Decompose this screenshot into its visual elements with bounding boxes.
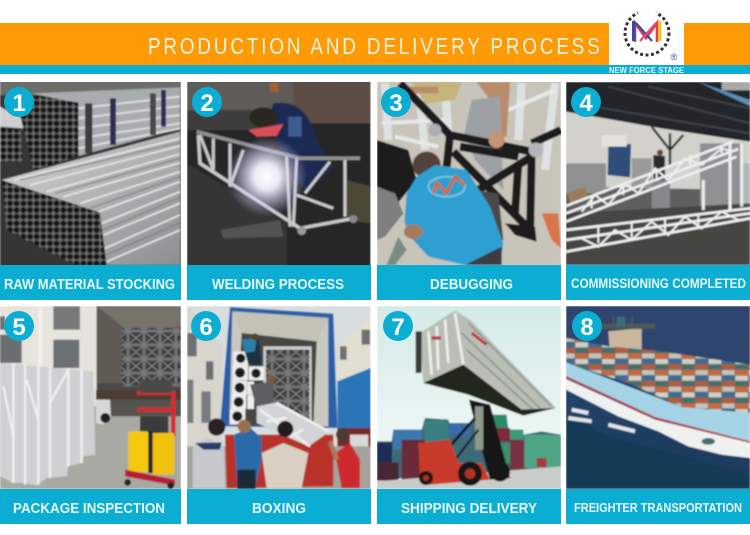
step number 5: 5	[12, 314, 26, 341]
step number 6	[191, 311, 221, 341]
panel 2: welding process	[187, 80, 371, 300]
step number 7: 7	[391, 314, 405, 341]
photo: container ship at sea	[566, 306, 750, 489]
panel 1: raw material stocking	[0, 80, 181, 300]
step number 4	[571, 87, 601, 117]
caption bar	[0, 265, 181, 300]
registered mark: ®	[671, 52, 678, 62]
caption bar	[187, 489, 371, 524]
panel 3: debugging	[377, 80, 561, 300]
photo: workers loading truss into container	[187, 306, 371, 489]
caption: BOXING	[252, 500, 306, 517]
step number 1	[4, 87, 34, 117]
brand name: NEW FORCE STAGE	[609, 66, 685, 75]
photo: packed trusses beside container and pallet truck	[0, 306, 181, 489]
photo: assembled truss in workshop	[566, 82, 750, 265]
caption bar	[566, 489, 750, 524]
caption: WELDING PROCESS	[212, 276, 344, 293]
step number 2	[192, 87, 222, 117]
panel 7: shipping delivery	[377, 306, 561, 524]
step number 8: 8	[580, 314, 594, 341]
photo: reach stacker lifting container	[377, 306, 561, 489]
photo: welder and glowing truss	[187, 80, 371, 267]
caption: RAW MATERIAL STOCKING	[4, 277, 175, 293]
panel 4: commissioning completed	[566, 82, 750, 300]
step number 2: 2	[200, 90, 214, 117]
header banner	[0, 7, 750, 74]
step number 3: 3	[389, 90, 403, 117]
title: PRODUCTION AND DELIVERY PROCESS	[148, 34, 600, 59]
caption: SHIPPING DELIVERY	[401, 500, 537, 517]
panel 8: freighter transportation	[566, 306, 750, 524]
caption bar	[566, 265, 750, 300]
photo: aluminium tube stacks	[0, 80, 181, 267]
step number 8	[572, 311, 602, 341]
caption: PACKAGE INSPECTION	[13, 500, 165, 517]
caption bar	[377, 489, 561, 524]
caption bar	[187, 265, 371, 300]
caption: DEBUGGING	[430, 276, 513, 293]
step number 5	[4, 311, 34, 341]
caption bar	[377, 265, 561, 300]
step number 7	[383, 311, 413, 341]
panel 5: package inspection	[0, 306, 181, 524]
step number 1: 1	[12, 90, 26, 117]
caption bar	[0, 489, 181, 524]
step number 4: 4	[579, 90, 593, 117]
logo: New Force Stage	[609, 7, 685, 75]
step number 3	[381, 87, 411, 117]
panel 6: boxing	[187, 306, 371, 524]
photo: technician adjusting black truss	[377, 80, 561, 267]
step number 6: 6	[199, 314, 213, 341]
